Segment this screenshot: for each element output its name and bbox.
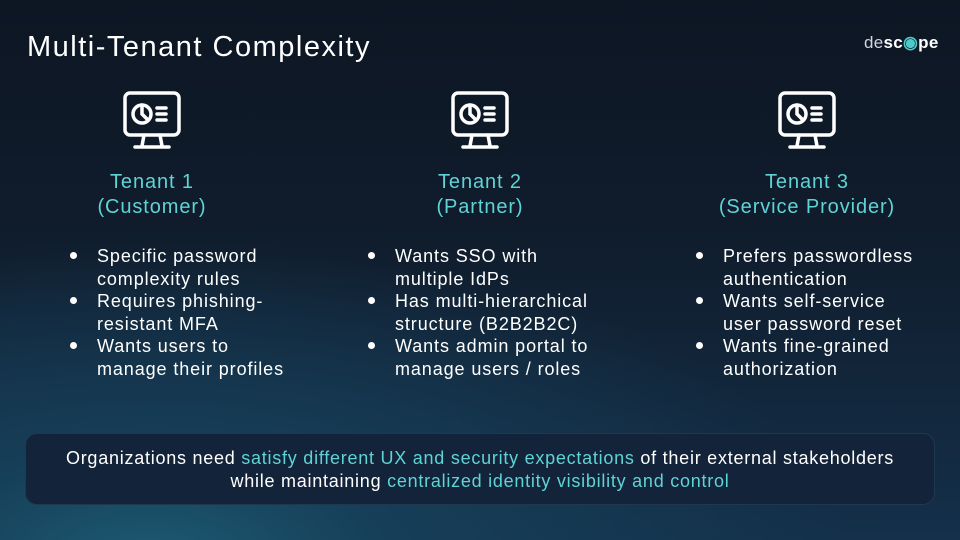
heading [719, 171, 895, 218]
bullets: user password reset [723, 314, 902, 334]
bullets: authentication [723, 268, 848, 288]
bullets: Wants users to [97, 336, 229, 356]
bullets: authorization [723, 358, 838, 378]
heading: (Service Provider) [719, 196, 895, 218]
panel: tenant 1 [70, 91, 284, 379]
heading: Tenant 2 [438, 171, 522, 193]
heading [436, 171, 524, 218]
bullets [696, 246, 913, 378]
panel: tenant 2 [368, 91, 588, 379]
bullets: complexity rules [97, 268, 240, 288]
bullets: Wants fine-grained [723, 336, 890, 356]
heading [97, 171, 206, 218]
heading: (Customer) [97, 196, 206, 218]
bullets [70, 246, 284, 379]
bullets: Wants SSO with [395, 246, 538, 266]
heading: Tenant 1 [110, 171, 194, 193]
icon: monitor [451, 91, 509, 149]
bullets: manage users / roles [395, 358, 581, 378]
bullets: Has multi-hierarchical [395, 291, 588, 311]
bullets: Wants self-service [723, 291, 886, 311]
panel: tenant 3 [696, 91, 913, 378]
bullets: structure (B2B2B2C) [395, 314, 578, 334]
callout: while maintaining centralized identity visibility and control [230, 470, 729, 490]
bullets: Requires phishing- [97, 291, 263, 311]
bullets: multiple IdPs [395, 268, 510, 288]
callout: Organizations need satisfy different UX and security expectations of their external stakeholders [66, 448, 894, 468]
icon: monitor [123, 91, 181, 149]
logo: desc◉pe [864, 33, 939, 52]
title: Multi-Tenant Complexity [27, 31, 371, 63]
heading: Tenant 3 [765, 171, 849, 193]
callout [25, 433, 935, 505]
bullets [368, 246, 588, 379]
bullets: Wants admin portal to [395, 336, 588, 356]
bullets: Prefers passwordless [723, 246, 913, 266]
icon: monitor [778, 91, 836, 149]
bullets: manage their profiles [97, 358, 284, 378]
bullets: Specific password [97, 246, 257, 266]
bullets: resistant MFA [97, 314, 219, 334]
heading: (Partner) [436, 196, 524, 218]
